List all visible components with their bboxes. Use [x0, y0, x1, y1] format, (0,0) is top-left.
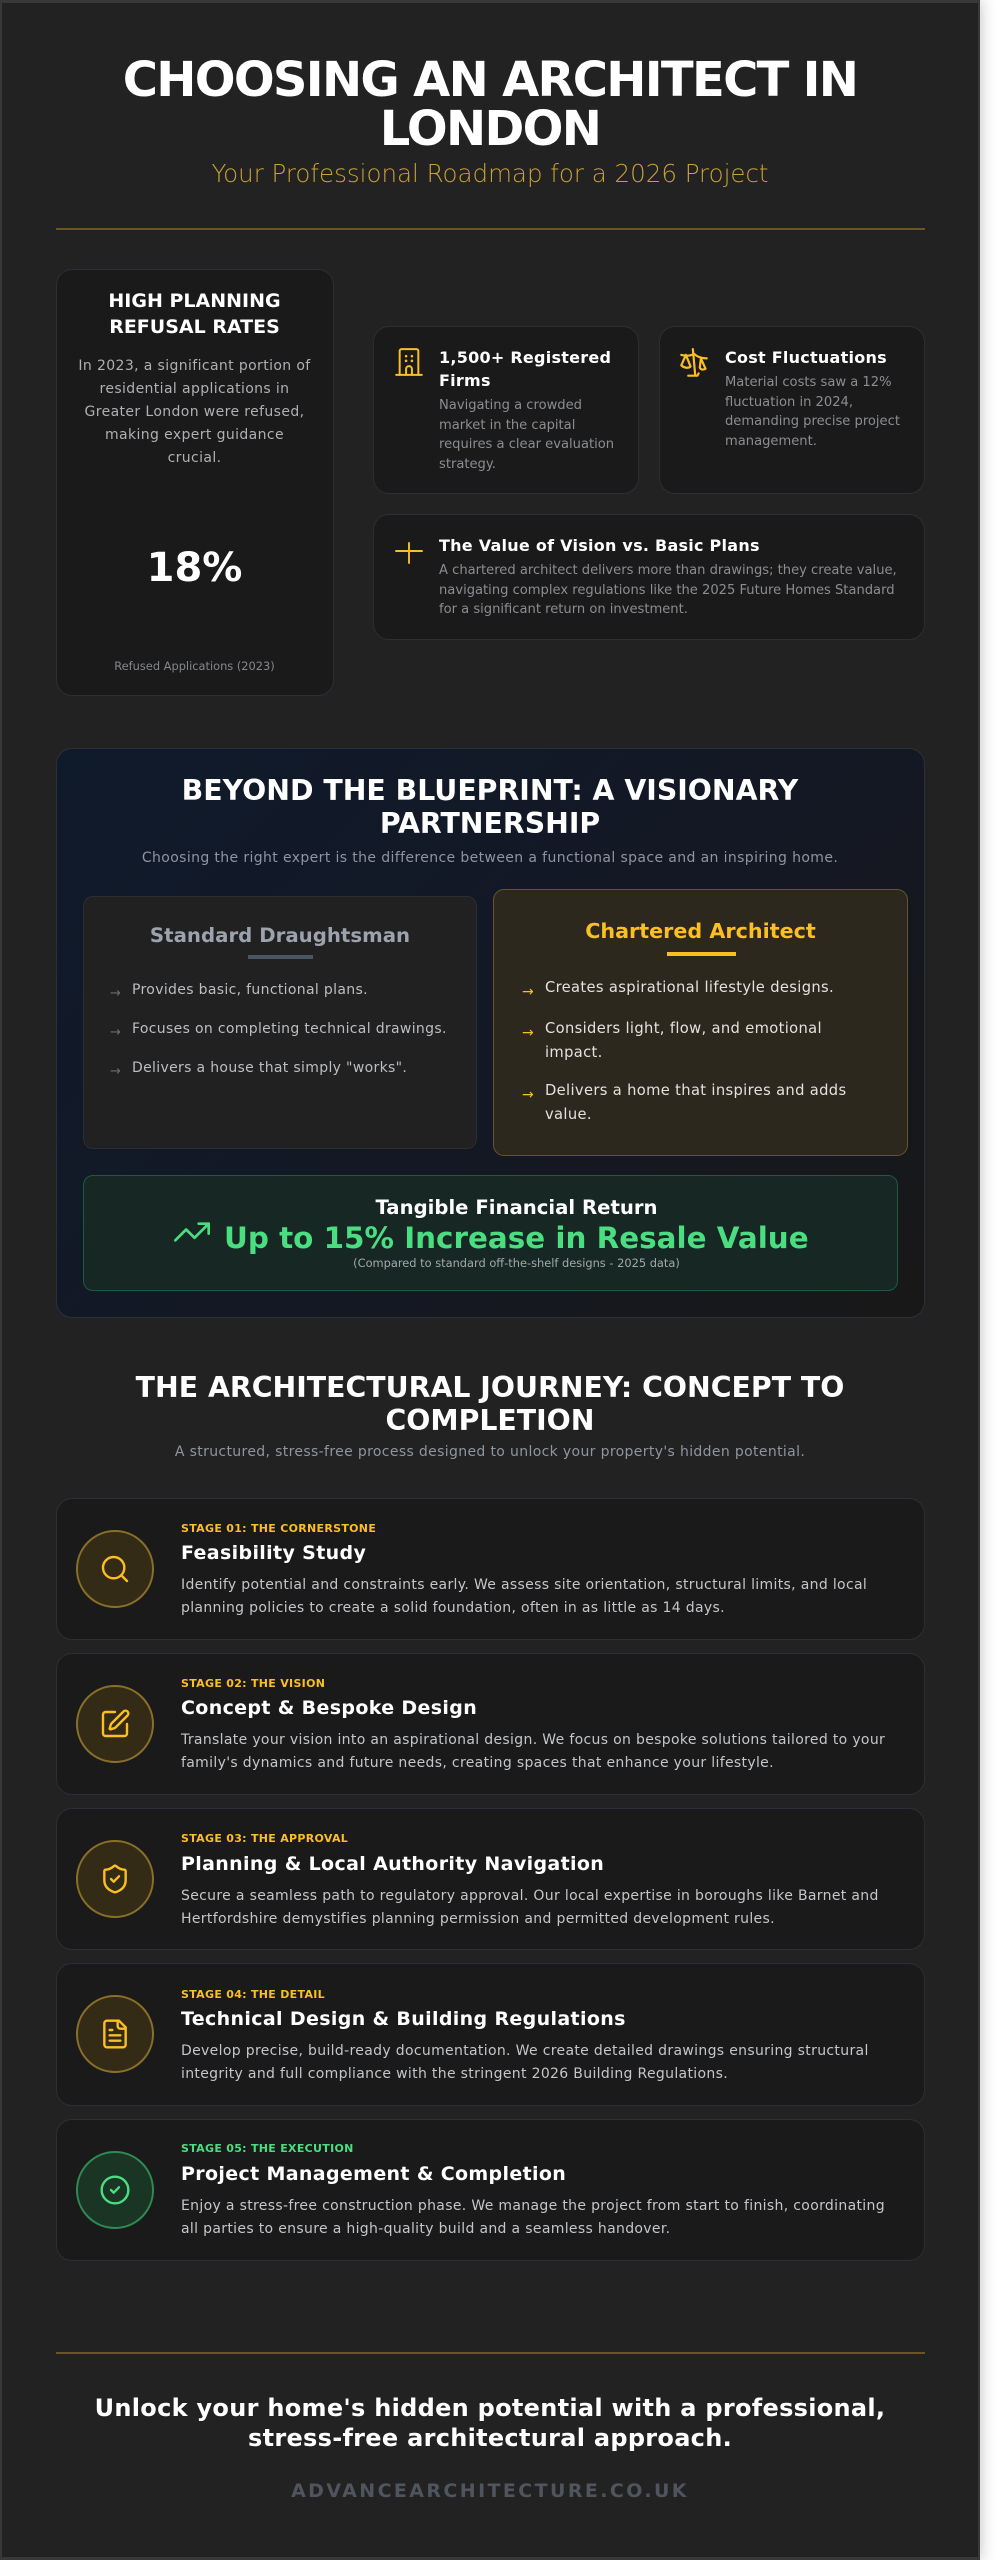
draughtsman list — [110, 982, 447, 1079]
panel: beyond the blueprint — [56, 748, 925, 1318]
section heading: BEYOND THE BLUEPRINT: A VISIONARY — [182, 774, 798, 807]
stage 04 description: integrity and full compliance with the stringent 2026 Building Regulations. — [181, 2066, 728, 2082]
architect list: Delivers a home that inspires and adds — [545, 1082, 846, 1099]
architect list: Considers light, flow, and emotional — [545, 1020, 822, 1037]
draughtsman list: Delivers a house that simply "works". — [132, 1060, 407, 1076]
firms text — [439, 348, 614, 472]
cost text: Material costs saw a 12% — [725, 375, 892, 390]
architect list: → — [522, 1025, 534, 1041]
stage 02 description — [180, 1732, 885, 1771]
stage 04 description: Develop precise, build-ready documentation. We create detailed drawings ensuring structural — [181, 2043, 869, 2059]
stage 01 description: Identify potential and constraints early. We assess site orientation, structural limits, and local — [181, 1577, 867, 1593]
panel: high planning refusal rates — [56, 269, 334, 696]
stage 03 card — [56, 1808, 925, 1950]
closing statement: stress-free architectural approach. — [248, 2424, 732, 2452]
stage 02 icon: pen — [76, 1685, 154, 1763]
icon: scales — [680, 348, 708, 377]
stage 04 title: Technical Design & Building Regulations — [181, 2008, 626, 2030]
panel: value of vision — [373, 514, 925, 640]
firms text: market in the capital — [439, 418, 575, 433]
stage 05 description: all parties to ensure a high-quality build and a seamless handover. — [181, 2221, 670, 2237]
firms text: Firms — [439, 371, 491, 390]
subtitle: Your Professional Roadmap for a 2026 Project — [211, 159, 769, 188]
stage 02 description: family's dynamics and future needs, creating spaces that enhance your lifestyle. — [181, 1755, 774, 1771]
firms text: 1,500+ Registered — [439, 348, 611, 367]
closing statement — [95, 2394, 885, 2452]
comparison: standard draughtsman — [83, 896, 477, 1149]
stage 05 label: STAGE 05: THE EXECUTION — [181, 2142, 354, 2155]
draughtsman underline — [248, 955, 313, 959]
stat heading — [108, 290, 281, 338]
draughtsman list: → — [110, 986, 121, 1001]
stat description — [78, 358, 311, 466]
value text — [439, 536, 897, 617]
stage 01 title: Feasibility Study — [181, 1542, 366, 1564]
section subtitle: Choosing the right expert is the difference between a functional space and an inspiring home. — [142, 850, 838, 866]
section heading: architectural journey: THE ARCHITECTURAL JOURNEY: CONCEPT TO — [136, 1371, 844, 1404]
callout heading: Tangible Financial Return — [375, 1196, 658, 1219]
stage 03 icon: shield — [76, 1840, 154, 1918]
stage 02 card — [56, 1653, 925, 1795]
firms text: strategy. — [439, 457, 496, 472]
draughtsman list: Provides basic, functional plans. — [132, 982, 368, 998]
panel: cost fluctuations — [659, 326, 925, 494]
section heading: PARTNERSHIP — [380, 807, 600, 840]
stat description: making expert guidance — [105, 427, 284, 443]
cost text: fluctuation in 2024, — [725, 395, 853, 410]
architect list: → — [522, 1087, 534, 1103]
value text: The Value of Vision vs. Basic Plans — [439, 536, 760, 555]
stage 02 description: Translate your vision into an aspirational design. We focus on bespoke solutions tailored to your — [181, 1732, 885, 1748]
callout figure: Up to 15% Increase in Resale Value — [224, 1221, 809, 1255]
architect list: value. — [545, 1106, 592, 1123]
stage 05 description: Enjoy a stress-free construction phase. We manage the project from start to finish, coordinating — [181, 2198, 885, 2214]
stage 03 description: Secure a seamless path to regulatory approval. Our local expertise in boroughs like Barnet and — [181, 1888, 879, 1904]
closing statement: Unlock your home's hidden potential with a professional, — [95, 2394, 885, 2422]
stage 05 title: Project Management & Completion — [181, 2163, 566, 2185]
stat heading: HIGH PLANNING — [108, 290, 281, 312]
stage 02 title: Concept & Bespoke Design — [181, 1697, 477, 1719]
stage 03 description: Hertfordshire demystifies planning permission and permitted development rules. — [181, 1911, 775, 1927]
stage 01 card — [56, 1498, 925, 1640]
icon: building — [395, 348, 423, 376]
stage 03 description — [181, 1888, 879, 1927]
stage 04 description — [181, 2043, 869, 2082]
firms text: requires a clear evaluation — [439, 437, 614, 452]
draughtsman list: → — [110, 1064, 121, 1079]
cost text: Cost Fluctuations — [725, 348, 887, 367]
title — [123, 52, 857, 157]
stage 04 card — [56, 1963, 925, 2106]
architect heading: Chartered Architect — [585, 919, 816, 943]
section subtitle: A structured, stress-free process designed to unlock your property's hidden potential. — [175, 1444, 805, 1460]
stat description: Greater London were refused, — [85, 404, 304, 420]
stat description: In 2023, a significant portion of — [78, 358, 311, 374]
callout: financial return — [83, 1175, 898, 1291]
stage 04 icon: document — [76, 1995, 154, 2073]
stat description: residential applications in — [100, 381, 289, 397]
architect list: Creates aspirational lifestyle designs. — [545, 979, 834, 996]
stage 01 icon: search — [76, 1530, 154, 1608]
title: CHOOSING AN ARCHITECT IN — [123, 52, 857, 108]
cost text: management. — [725, 434, 817, 449]
website: ADVANCEARCHITECTURE.CO.UK — [291, 2480, 689, 2502]
cost text — [725, 348, 900, 449]
draughtsman list: → — [110, 1025, 121, 1040]
stage 01 label: STAGE 01: THE CORNERSTONE — [181, 1522, 376, 1535]
stage 02 label: STAGE 02: THE VISION — [181, 1677, 325, 1690]
firms text: Navigating a crowded — [439, 398, 582, 413]
value text: navigating complex regulations like the 2025 Future Homes Standard — [439, 583, 895, 598]
value text: A chartered architect delivers more than drawings; they create value, — [439, 563, 897, 578]
value text: for a significant return on investment. — [439, 602, 688, 617]
stat caption: Refused Applications (2023) — [114, 659, 275, 673]
architect underline — [667, 952, 736, 956]
section heading: architectural journey: COMPLETION — [386, 1404, 594, 1437]
stage 01 description: planning policies to create a solid foundation, often in as little as 14 days. — [181, 1600, 725, 1616]
stage 03 title: Planning & Local Authority Navigation — [181, 1853, 604, 1875]
section heading: architectural journey — [136, 1371, 844, 1437]
stage 05 card — [56, 2119, 925, 2261]
architect list: impact. — [545, 1044, 603, 1061]
draughtsman list: Focuses on completing technical drawings. — [132, 1021, 447, 1037]
callout footnote: (Compared to standard off-the-shelf designs - 2025 data) — [353, 1256, 680, 1270]
stat heading: REFUSAL RATES — [109, 316, 280, 338]
section heading — [182, 774, 798, 840]
stage 05 description — [181, 2198, 885, 2237]
draughtsman heading: Standard Draughtsman — [150, 924, 410, 947]
panel: registered firms — [373, 326, 639, 494]
title: LONDON — [380, 101, 600, 157]
architect list — [522, 979, 846, 1123]
stage 01 description — [181, 1577, 867, 1616]
stage 04 label: STAGE 04: THE DETAIL — [181, 1988, 325, 2001]
stage 05 icon: check circle — [76, 2151, 154, 2229]
stat value: 18%: 18% — [147, 545, 242, 591]
cost text: demanding precise project — [725, 414, 900, 429]
comparison: chartered architect — [493, 889, 908, 1156]
icon: plus — [395, 542, 423, 564]
architect list: → — [522, 984, 534, 1000]
stat description: crucial. — [168, 450, 221, 466]
icon: trending up — [174, 1222, 210, 1242]
stage 03 label: STAGE 03: THE APPROVAL — [181, 1832, 348, 1845]
